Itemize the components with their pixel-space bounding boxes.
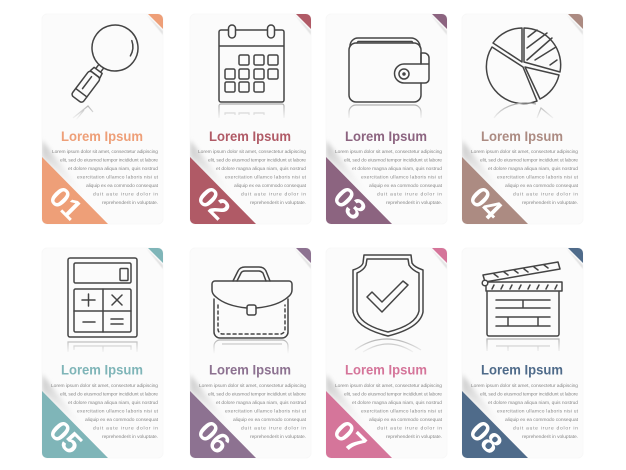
reflection: pie chart — [494, 103, 553, 118]
number: 03 — [327, 181, 372, 226]
body text: Lorem ipsum dolor sit amet, consectetur adipiscing — [199, 383, 306, 389]
body text: duit aute irure dolor in — [241, 426, 306, 432]
body text: elit, sed do eiusmod tempor incididunt ut labore — [60, 392, 158, 398]
icon: clapperboard — [482, 262, 562, 336]
body text: exercitation ullamco laboris nisi ut — [497, 408, 579, 414]
card 6 background and corners — [190, 248, 311, 458]
icon: briefcase — [212, 267, 292, 338]
body text: Lorem ipsum dolor sit amet, consectetur adipiscing — [335, 149, 442, 155]
icon: shield — [353, 255, 423, 336]
icon: wallet — [349, 38, 429, 102]
body text: et dolore magna aliqua niam, quis nostrud — [68, 400, 158, 406]
body text: et dolore magna aliqua niam, quis nostrud — [68, 166, 158, 172]
body text: duit aute irure dolor in — [241, 192, 306, 198]
card 6: briefcase — [190, 248, 311, 460]
body text: reprehenderit in voluptate. — [522, 434, 578, 440]
body text: aliquip ex ea commodo consequat — [505, 417, 579, 423]
body text: exercitation ullamco laboris nisi ut — [225, 174, 307, 180]
card 8 background and corners — [462, 248, 583, 458]
body text: et dolore magna aliqua niam, quis nostrud — [216, 166, 306, 172]
body text: et dolore magna aliqua niam, quis nostrud — [488, 166, 578, 172]
body text: et dolore magna aliqua niam, quis nostrud — [488, 400, 578, 406]
body text: duit aute irure dolor in — [513, 192, 578, 198]
card 5 background and corners — [42, 248, 163, 458]
card 5: calculator — [42, 248, 163, 460]
body text: elit, sed do eiusmod tempor incididunt ut labore — [344, 392, 442, 398]
card 7 background and corners — [326, 248, 447, 458]
card 7: shield — [326, 248, 447, 460]
body text: duit aute irure dolor in — [513, 426, 578, 432]
body text: reprehenderit in voluptate. — [250, 434, 306, 440]
card 4: pie chart — [462, 14, 583, 226]
body text: aliquip ex ea commodo consequat — [369, 417, 443, 423]
body text: elit, sed do eiusmod tempor incididunt ut labore — [208, 392, 306, 398]
body text: reprehenderit in voluptate. — [102, 434, 158, 440]
body text: aliquip ex ea commodo consequat — [233, 417, 307, 423]
body text: duit aute irure dolor in — [93, 426, 158, 432]
body text: exercitation ullamco laboris nisi ut — [361, 408, 443, 414]
card 2 background and corners — [190, 14, 311, 224]
body text: elit, sed do eiusmod tempor incididunt ut labore — [480, 392, 578, 398]
body text: et dolore magna aliqua niam, quis nostrud — [352, 166, 442, 172]
body text: Lorem ipsum dolor sit amet, consectetur adipiscing — [471, 383, 578, 389]
number: 01 — [43, 181, 88, 226]
title: Lorem Ipsum — [481, 128, 563, 144]
body text: et dolore magna aliqua niam, quis nostrud — [352, 400, 442, 406]
title: Lorem Ipsum — [209, 128, 291, 144]
card 8: clapperboard — [462, 248, 583, 460]
reflection: shield — [355, 339, 421, 352]
title: Lorem Ipsum — [481, 362, 563, 378]
title: Lorem Ipsum — [345, 362, 427, 378]
body text: Lorem ipsum dolor sit amet, consectetur adipiscing — [335, 383, 442, 389]
card 4 background and corners — [462, 14, 583, 224]
body text: exercitation ullamco laboris nisi ut — [361, 174, 443, 180]
body text: Lorem ipsum dolor sit amet, consectetur adipiscing — [198, 149, 306, 155]
icon: calculator — [68, 258, 137, 337]
number: 04 — [463, 181, 508, 226]
number: 07 — [327, 415, 372, 460]
body text: elit, sed do eiusmod tempor incididunt ut labore — [344, 158, 442, 164]
body text: aliquip ex ea commodo consequat — [234, 183, 307, 189]
icon: pie chart — [486, 28, 561, 104]
body text: elit, sed do eiusmod tempor incididunt ut labore — [208, 158, 306, 164]
body text: reprehenderit in voluptate. — [386, 434, 442, 440]
card 3: wallet — [326, 14, 447, 226]
card 1 background and corners — [42, 14, 163, 224]
body text: elit, sed do eiusmod tempor incididunt ut labore — [480, 158, 578, 164]
body text: duit aute irure dolor in — [377, 426, 442, 432]
body text: duit aute irure dolor in — [377, 192, 442, 198]
number: 08 — [463, 415, 508, 460]
card 3 background and corners — [326, 14, 447, 224]
body text: reprehenderit in voluptate. — [250, 200, 306, 206]
number: 02 — [191, 181, 236, 226]
body text: Lorem ipsum dolor sit amet, consectetur adipiscing — [471, 149, 578, 155]
body text: duit aute irure dolor in — [93, 192, 158, 198]
icon: calendar — [219, 25, 284, 102]
reflection: briefcase — [214, 340, 288, 354]
body text: aliquip ex ea commodo consequat — [86, 183, 159, 189]
body text: reprehenderit in voluptate. — [102, 200, 158, 206]
title: Lorem Ipsum — [209, 362, 291, 378]
reflection: magnifying glass — [73, 106, 93, 120]
title: Lorem Ipsum — [61, 128, 143, 144]
title: Lorem Ipsum — [345, 128, 427, 144]
number: 06 — [191, 415, 236, 460]
body text: aliquip ex ea commodo consequat — [369, 183, 443, 189]
card 1: search — [42, 14, 163, 226]
body text: elit, sed do eiusmod tempor incididunt ut labore — [60, 158, 158, 164]
body text: reprehenderit in voluptate. — [386, 200, 442, 206]
icon: magnifying glass — [58, 16, 147, 113]
body text: aliquip ex ea commodo consequat — [85, 417, 159, 423]
body text: Lorem ipsum dolor sit amet, consectetur adipiscing — [51, 383, 158, 389]
body text: exercitation ullamco laboris nisi ut — [497, 174, 579, 180]
number: 05 — [43, 415, 88, 460]
reflection: wallet — [349, 105, 421, 118]
body text: et dolore magna aliqua niam, quis nostrud — [216, 400, 306, 406]
body text: aliquip ex ea commodo consequat — [505, 183, 579, 189]
body text: Lorem ipsum dolor sit amet, consectetur adipiscing — [52, 149, 158, 155]
title: Lorem Ipsum — [61, 362, 143, 378]
reflection: calendar — [219, 104, 284, 118]
card 2: calendar — [190, 14, 311, 226]
reflection: clapperboard — [487, 339, 559, 351]
reflection: calculator — [68, 342, 137, 352]
body text: exercitation ullamco laboris nisi ut — [77, 408, 159, 414]
body text: exercitation ullamco laboris nisi ut — [225, 408, 307, 414]
body text: reprehenderit in voluptate. — [522, 200, 578, 206]
body text: exercitation ullamco laboris nisi ut — [77, 174, 159, 180]
